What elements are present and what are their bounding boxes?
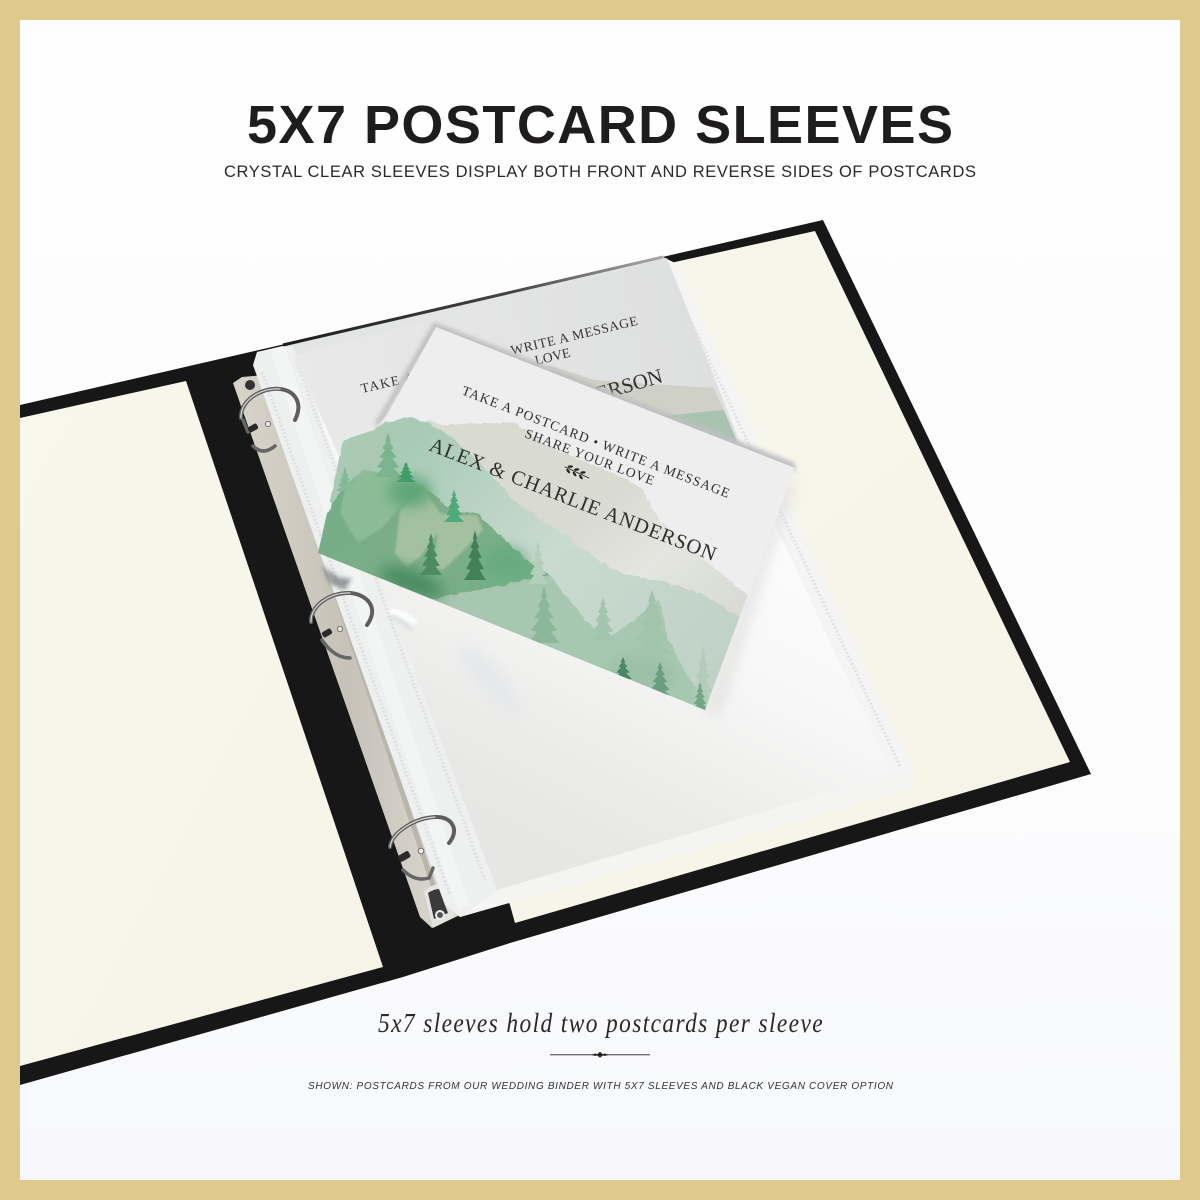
divider ornament: [550, 1052, 650, 1058]
left sleeve strip: [253, 346, 497, 917]
card face: [318, 327, 795, 710]
binder black cover: [20, 220, 1091, 1085]
card text: TAKE A POSTCARD • WRITE A MESSAGE: [460, 383, 732, 501]
soft fold shading: [452, 638, 528, 722]
right cream page: [300, 231, 1070, 923]
subtitle: CRYSTAL CLEAR SLEEVES DISPLAY BOTH FRONT AND REVERSE SIDES OF POSTCARDS: [224, 163, 976, 181]
upper sleeve tint: [283, 257, 672, 358]
footnote: SHOWN: POSTCARDS FROM OUR WEDDING BINDER WITH 5X7 SLEEVES AND BLACK VEGAN COVER OPTION: [308, 1081, 894, 1092]
sleeve top edge: [283, 257, 663, 345]
ring: middle: [311, 593, 372, 658]
rear card text: LOVE: [533, 345, 572, 368]
caption: 5x7 sleeves hold two postcards per sleeve: [378, 1008, 824, 1038]
rear postcard: [293, 258, 745, 590]
pale green ridge: [330, 417, 740, 698]
bottom sleeve seam: [460, 770, 913, 917]
title: 5X7 POSTCARD SLEEVES: [247, 95, 953, 155]
clear sleeve: [253, 257, 913, 917]
hazy upper left: [352, 424, 380, 480]
card text: [426, 383, 732, 566]
dark left hill: [318, 470, 552, 600]
ring: top: [241, 389, 298, 451]
rear card mountains: [548, 365, 738, 442]
rear card text: ANDERSON: [549, 364, 665, 418]
binder: [20, 220, 1091, 1085]
color washes: [388, 477, 432, 507]
front postcard: [300, 327, 795, 730]
rear card text: [359, 313, 665, 418]
right sleeve strip: [652, 262, 913, 774]
rear card face: [293, 258, 745, 590]
card text: ALEX & CHARLIE ANDERSON: [426, 434, 719, 566]
binder rings: [241, 389, 454, 879]
metal ring bar: [233, 372, 460, 928]
icon: leaf sprig: [563, 462, 591, 483]
rear card text: TAKE A: [359, 369, 416, 396]
pine trees: [336, 433, 714, 710]
watercolor mountains: [318, 417, 748, 710]
ring: bottom: [390, 817, 454, 879]
sleeve body: [257, 257, 913, 917]
beige ridge: [413, 418, 748, 617]
rear card text: WRITE A MESSAGE: [509, 313, 639, 358]
sleeve shine near ring: [322, 566, 418, 630]
card shadow: [374, 322, 795, 716]
card text: SHARE YOUR LOVE: [523, 426, 656, 488]
lower middle hill: [432, 575, 707, 708]
left cream page: [20, 381, 383, 1066]
pale tree shapes: [340, 470, 401, 542]
